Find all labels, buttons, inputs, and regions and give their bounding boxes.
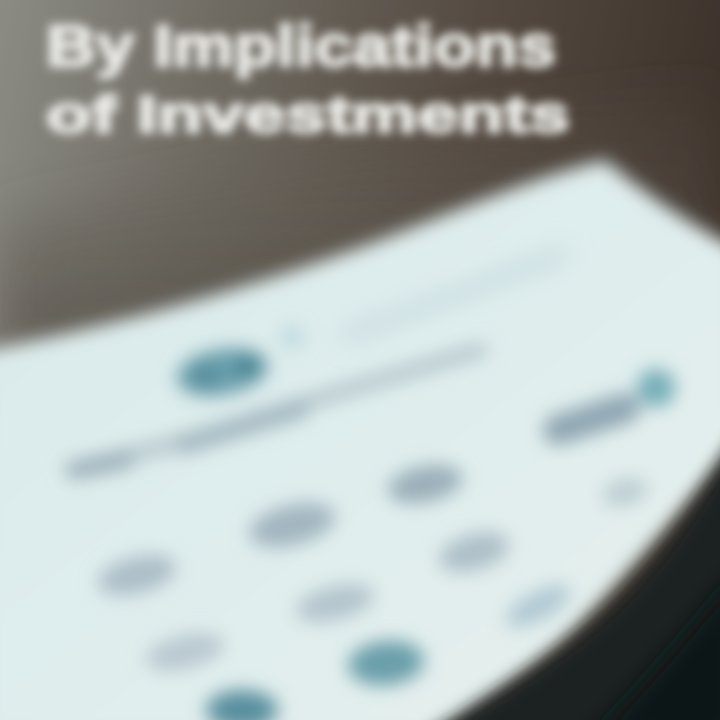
right logo blob — [558, 369, 675, 430]
title: of Investments — [46, 86, 570, 144]
dark foreground object, bottom right — [425, 435, 720, 720]
long text line — [72, 350, 480, 470]
title: By Implications — [46, 14, 556, 79]
background shadow above the paper — [0, 70, 720, 360]
table cell blobs — [94, 458, 651, 678]
header line on paper — [350, 255, 560, 335]
title — [46, 14, 570, 144]
dark corner shadow — [590, 570, 720, 720]
panel: paper document — [0, 160, 720, 720]
logo blob — [173, 327, 302, 403]
teal blobs at bottom — [206, 637, 426, 720]
